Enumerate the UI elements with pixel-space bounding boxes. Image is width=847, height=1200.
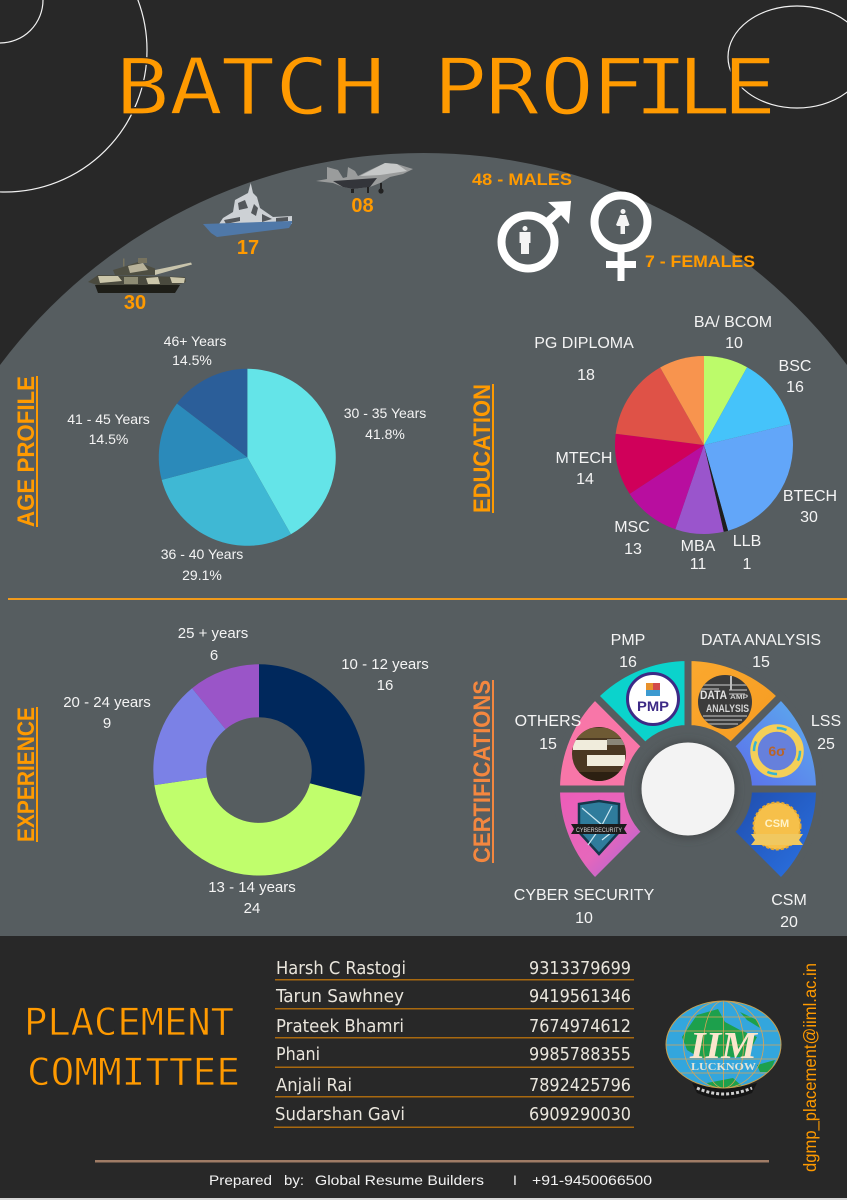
education labels: BTECH (783, 488, 837, 505)
education labels: 1 (743, 556, 752, 573)
panel: experience (13, 625, 429, 917)
age labels: 46+ Years (164, 333, 226, 349)
footer credit: by: (284, 1172, 304, 1188)
education labels: 30 (800, 509, 818, 526)
certification labels: DATA ANALYSIS (701, 632, 821, 649)
experience labels: 10 - 12 years (341, 656, 429, 673)
title: BATCH PROFILE (115, 42, 776, 133)
females label: 7 - FEMALES (645, 252, 755, 271)
education labels: MTECH (556, 450, 612, 467)
experience labels: 13 - 14 years (208, 879, 296, 896)
icon: data analysis: DATA (700, 688, 727, 702)
education labels (534, 314, 837, 573)
contact table: 9313379699 (529, 958, 631, 979)
contact table: 9419561346 (529, 986, 631, 1007)
icon: others file tags (572, 727, 626, 781)
icon: data analysis (698, 675, 752, 729)
centre circle (639, 741, 737, 839)
vertical email: dgmp_placement@iiml.ac.in (800, 963, 821, 1172)
education labels: 16 (786, 379, 804, 396)
footer credit: Prepared (209, 1172, 272, 1188)
icon: CSM seal: CSM (765, 818, 789, 830)
contact table: Anjali Rai (276, 1075, 352, 1096)
panel: placement committee (24, 958, 821, 1172)
contact table: Harsh C Rastogi (276, 958, 406, 979)
age labels: 14.5% (89, 431, 128, 447)
section divider (8, 598, 847, 600)
certification labels: PMP (611, 632, 645, 649)
certification labels: CYBER SECURITY (514, 887, 655, 904)
education labels: MBA (681, 538, 716, 555)
contact table: Tarun Sawhney (275, 986, 404, 1007)
education labels: 13 (624, 541, 642, 558)
education labels: BA/ BCOM (694, 314, 772, 331)
experience labels (63, 625, 429, 917)
icon: PMP badge: PMP (637, 698, 669, 714)
icon: six sigma ring: 6σ (768, 743, 786, 759)
grey dome panel (0, 153, 847, 936)
icon: PMP badge (628, 674, 678, 724)
icon: six sigma ring (754, 728, 800, 774)
heading: education: EDUCATION (469, 384, 496, 513)
committee heading (24, 1001, 240, 1094)
contact table: Sudarshan Gavi (275, 1104, 405, 1125)
education labels: MSC (614, 519, 650, 536)
heading: certifications: CERTIFICATIONS (469, 680, 496, 863)
experience labels: 20 - 24 years (63, 694, 151, 711)
icon: ship (203, 183, 292, 237)
education labels: 14 (576, 471, 594, 488)
certification labels (514, 632, 841, 931)
experience labels: 6 (210, 647, 218, 664)
certification labels: 15 (539, 736, 557, 753)
logo: IIM Lucknow globe (666, 1001, 781, 1099)
education labels: 18 (577, 367, 595, 384)
jet count: 08 (351, 195, 374, 217)
education labels: 10 (725, 335, 743, 352)
footer credit: +91-9450066500 (532, 1172, 652, 1188)
icon: data analysis: AMP (730, 695, 748, 701)
heading: age profile: AGE PROFILE (13, 376, 40, 527)
education labels: 11 (690, 556, 706, 573)
contact table (274, 958, 634, 1128)
certification labels: 25 (817, 736, 835, 753)
experience labels: 9 (103, 715, 111, 732)
footer rule (95, 1160, 769, 1162)
icon: fighter jet (316, 163, 413, 194)
icon: male symbol (502, 201, 571, 268)
contact table: 7674974612 (529, 1016, 631, 1037)
experience labels: 24 (244, 900, 260, 917)
donut chart: experience (153, 664, 365, 876)
certification labels: LSS (811, 713, 841, 730)
heading: experience: EXPERIENCE (13, 707, 40, 842)
age labels: 36 - 40 Years (161, 546, 243, 562)
certification labels: OTHERS (515, 713, 581, 730)
icon: female symbol (594, 196, 648, 281)
contact table: 9985788355 (529, 1044, 631, 1065)
panel: certifications (469, 632, 841, 931)
contact table: 7892425796 (529, 1075, 631, 1096)
panel: education (469, 314, 837, 573)
age labels: 14.5% (172, 352, 212, 368)
age labels: 41 - 45 Years (67, 411, 150, 427)
contact table: 6909290030 (529, 1104, 631, 1125)
certification labels: 20 (780, 914, 798, 931)
experience labels: 25 + years (178, 625, 248, 642)
footer credit: Global Resume Builders (315, 1172, 484, 1188)
age labels: 30 - 35 Years (344, 405, 426, 421)
footer credit (209, 1172, 652, 1188)
pie chart: education (615, 356, 793, 534)
certification labels: 16 (619, 654, 637, 671)
committee heading: COMMITTEE (27, 1051, 240, 1094)
ship count: 17 (237, 237, 259, 259)
age labels: 41.8% (365, 426, 405, 442)
age labels: 29.1% (182, 567, 222, 583)
education labels: LLB (733, 533, 761, 550)
icon: tank (88, 258, 192, 293)
icon: data analysis: ANALYSIS (706, 703, 749, 715)
certification labels: CSM (771, 892, 807, 909)
age labels (67, 333, 426, 583)
icon: cyber security shield (571, 801, 627, 854)
committee heading: PLACEMENT (24, 1001, 234, 1044)
pie chart: age (159, 369, 336, 546)
tank count: 30 (124, 292, 146, 314)
footer credit: I (513, 1172, 517, 1188)
education labels: PG DIPLOMA (534, 335, 634, 352)
panel: age profile (13, 333, 426, 583)
certification labels: 15 (752, 654, 770, 671)
contact table: Prateek Bhamri (276, 1016, 404, 1037)
experience labels: 16 (377, 677, 393, 694)
certification labels: 10 (575, 910, 593, 927)
males label: 48 - MALES (472, 170, 572, 189)
contact table: Phani (276, 1044, 320, 1065)
radial segments (556, 658, 820, 882)
icon: cyber security shield: CYBERSECURITY (576, 827, 623, 834)
decorative circles (0, 0, 847, 192)
logo: IIM Lucknow globe: IIM (689, 1025, 758, 1067)
icon: CSM seal (751, 802, 803, 850)
logo: IIM Lucknow globe: LUCKNOW (691, 1062, 757, 1073)
education labels: BSC (779, 358, 811, 375)
bottom page edge (0, 1198, 847, 1200)
